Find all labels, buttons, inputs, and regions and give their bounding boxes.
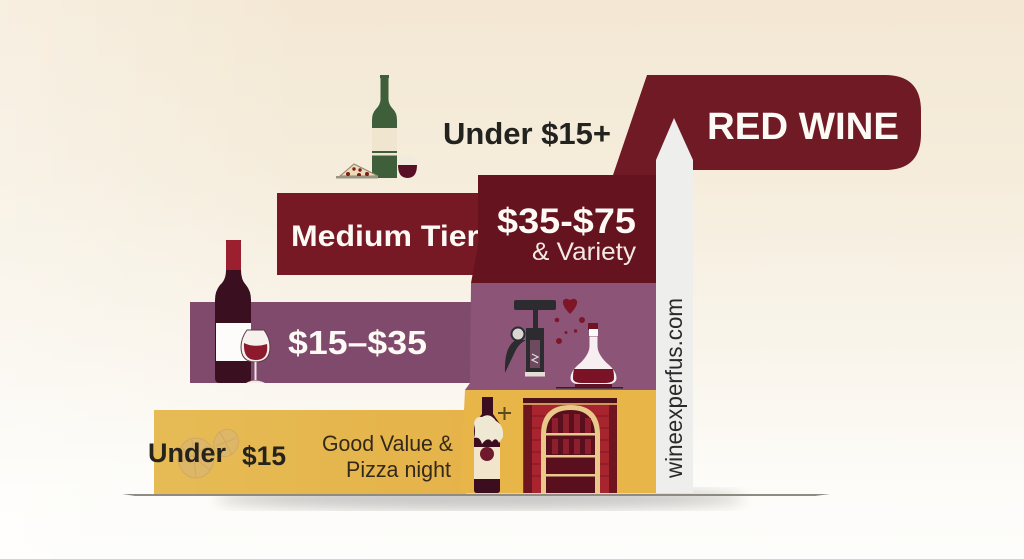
heading: under $15+: Under $15+ (443, 116, 611, 151)
price: under $15: Under (148, 438, 226, 468)
panel: medium tier (277, 193, 482, 275)
panel: cellar block (460, 390, 656, 493)
icon: decanter (556, 323, 623, 388)
banner title: RED WINE (707, 106, 899, 148)
panel: $35-$75 (471, 175, 656, 283)
icon: green bottle with pizza and glass (336, 75, 417, 178)
icon: wine cellar (523, 398, 617, 493)
icon: corkscrew (505, 300, 556, 376)
price: $35-$75: $35-$75 (497, 202, 636, 241)
price: under $15: $15 (242, 441, 286, 471)
price: under $15 (148, 438, 286, 471)
white column with site name (656, 118, 693, 493)
icon: faint cork (178, 425, 243, 478)
caption: good value and pizza night: Good Value & (322, 431, 453, 456)
red wine banner (613, 75, 921, 175)
site name: wineexperfus.com (661, 298, 687, 479)
floor shadow (122, 489, 830, 509)
price: $15-$35: $15–$35 (288, 324, 427, 361)
caption: good value and pizza night (322, 431, 453, 482)
panel: corkscrew and decanter (465, 283, 656, 390)
icon: heart and droplets (555, 299, 585, 344)
icon: bottle with plus (474, 397, 511, 493)
panel: $15-$35 (190, 302, 472, 383)
panel: under $15 (148, 410, 466, 494)
label: medium tier: Medium Tier (291, 220, 479, 253)
caption: & variety: & Variety (532, 238, 637, 266)
caption: good value and pizza night: Pizza night (346, 457, 451, 482)
icon: red bottle with wine glass (215, 240, 270, 383)
